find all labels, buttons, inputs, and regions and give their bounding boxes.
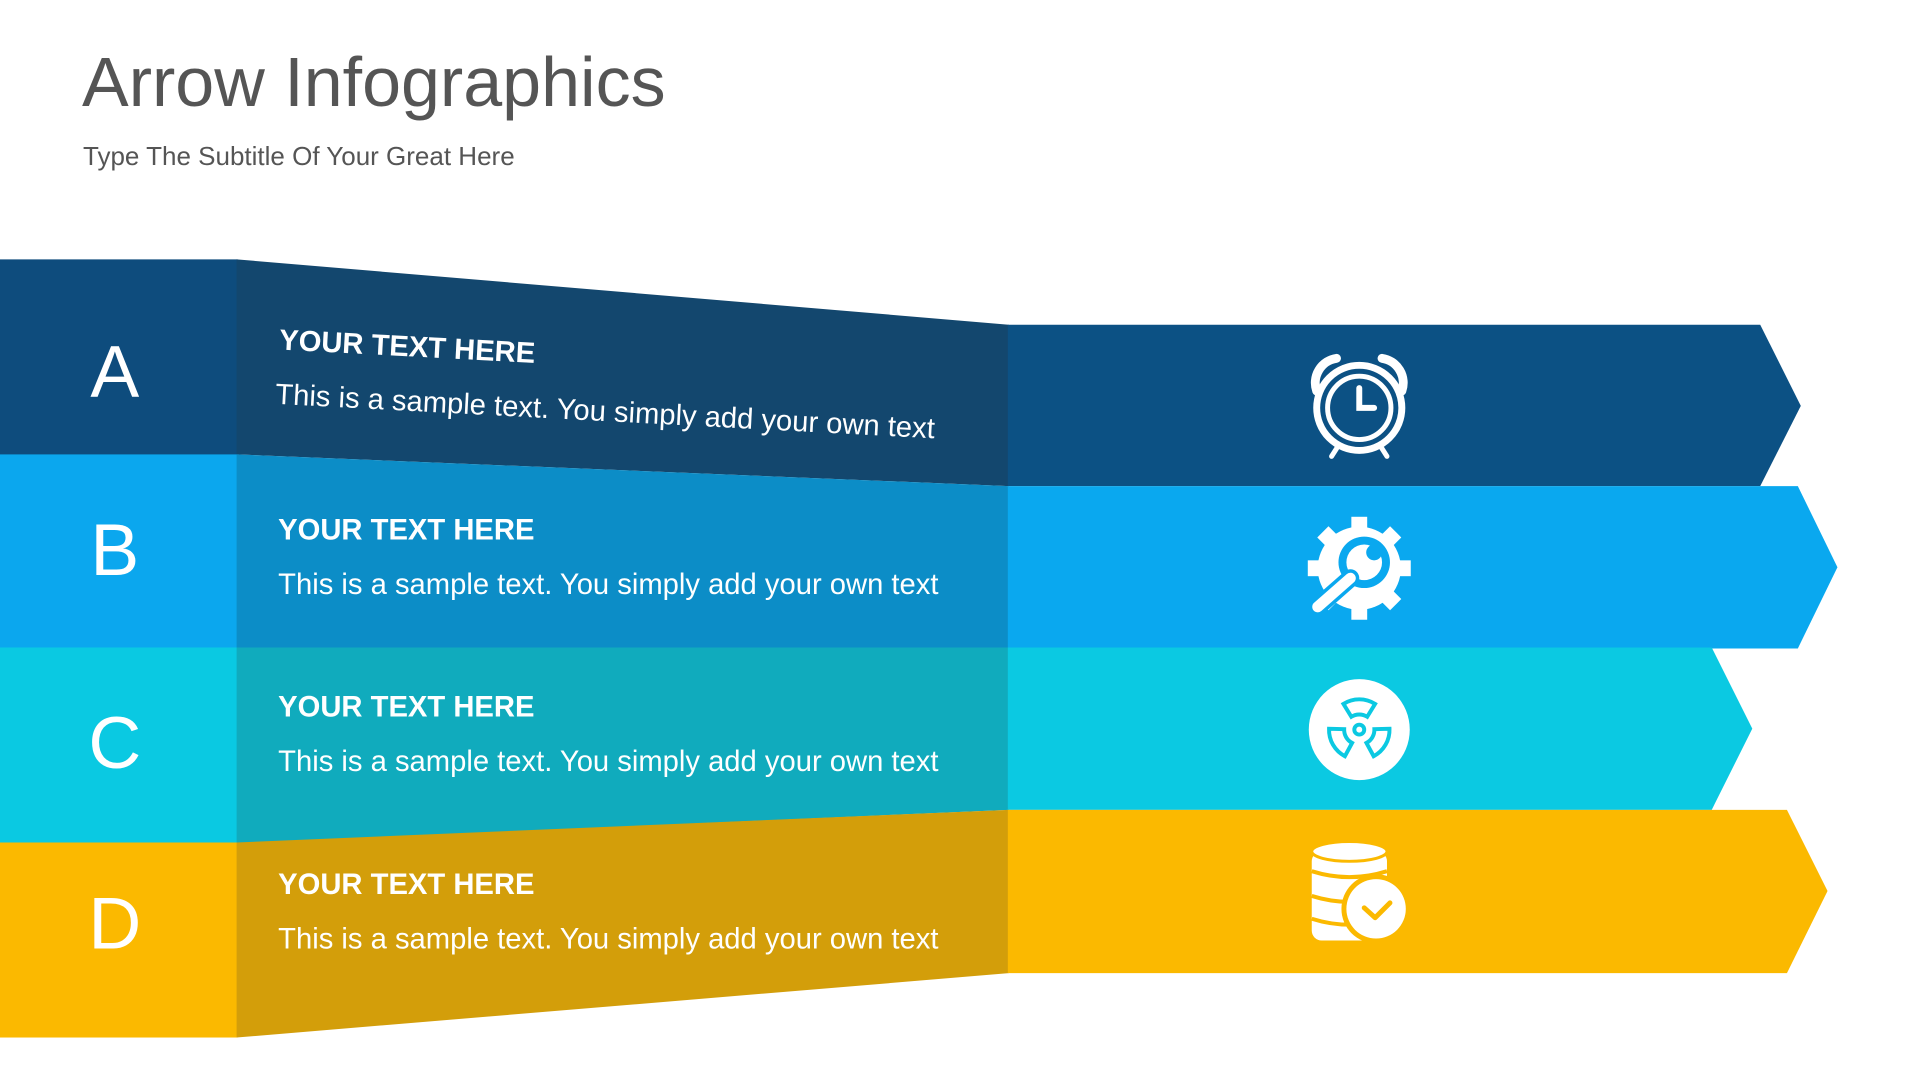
row A: This is a sample text. You simply add your own text — [275, 379, 936, 445]
row C — [0, 647, 1752, 843]
row C: YOUR TEXT HERE — [278, 692, 534, 724]
title: Arrow Infographics — [82, 43, 666, 121]
icon: database check — [1312, 842, 1411, 943]
row D: This is a sample text. You simply add your own text — [278, 923, 938, 955]
row C: C — [88, 702, 141, 784]
subtitle: Type The Subtitle Of Your Great Here — [83, 141, 515, 171]
row D — [0, 810, 1828, 1038]
row C: This is a sample text. You simply add your own text — [278, 746, 938, 778]
row B: YOUR TEXT HERE — [278, 515, 534, 547]
icon: radiation — [1309, 679, 1410, 780]
row B — [0, 454, 1837, 648]
row D: YOUR TEXT HERE — [278, 869, 534, 901]
row A: A — [90, 331, 139, 413]
row B: This is a sample text. You simply add your own text — [278, 569, 938, 601]
row A: YOUR TEXT HERE — [278, 324, 536, 370]
icon: gear wrench — [1308, 517, 1411, 620]
row D: D — [88, 882, 141, 964]
icon: alarm clock — [1315, 358, 1403, 456]
row B: B — [90, 509, 139, 591]
row A — [0, 259, 1801, 486]
